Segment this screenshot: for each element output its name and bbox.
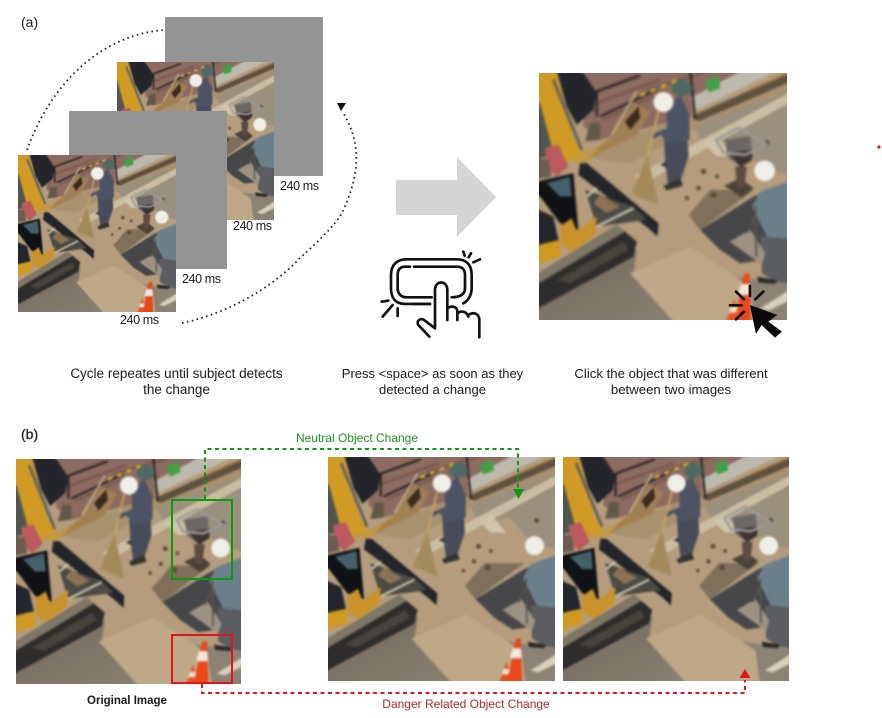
caption: press space: Press <space> as soon as they	[342, 366, 524, 381]
scene image with cone, front	[4, 142, 191, 325]
highlight box: danger object	[172, 635, 232, 683]
label: neutral object change: Neutral Object Change	[296, 431, 418, 445]
label: 240 ms front image: 240 ms	[120, 313, 159, 327]
blank gray frame, back	[165, 17, 323, 176]
caption: cycle repeats: Cycle repeates until subject detects	[70, 366, 283, 381]
arrow: dotted cycle return, left arc	[27, 30, 164, 150]
icon: mouse cursor clicking cone	[730, 286, 782, 338]
panel label (a): (a)	[21, 14, 38, 30]
arrow: dotted cycle return, right arc	[182, 103, 356, 323]
label: 240 ms back gray: 240 ms	[280, 179, 319, 193]
caption: click the object: between two images	[611, 382, 732, 397]
scene image without cone, back	[103, 49, 289, 233]
label: danger related object change: Danger Related Object Change	[382, 697, 550, 711]
highlight box: neutral object	[172, 500, 232, 579]
arrow: neutral change dashed connector	[205, 449, 524, 499]
label: 240 ms back image: 240 ms	[233, 219, 272, 233]
panel: danger object removed image	[543, 439, 810, 699]
panel: original image	[0, 441, 262, 702]
panel: neutral object removed image	[308, 439, 576, 699]
blank gray frame, front	[69, 111, 227, 269]
label: 240 ms front gray: 240 ms	[182, 272, 221, 286]
panel: click response image	[517, 53, 810, 340]
red dot marker	[877, 145, 881, 149]
caption: press space: detected a change	[379, 382, 486, 397]
panel label (b): (b)	[21, 426, 38, 442]
arrow: gray large right arrow	[396, 157, 496, 237]
icon: finger pressing space key	[382, 252, 480, 337]
arrow: danger change dashed connector	[202, 669, 750, 693]
caption: cycle repeats: the change	[143, 382, 210, 397]
panel: flicker image stack	[4, 17, 323, 325]
caption: original image: Original Image	[87, 695, 167, 707]
caption: click the object: Click the object that was different	[574, 366, 768, 381]
